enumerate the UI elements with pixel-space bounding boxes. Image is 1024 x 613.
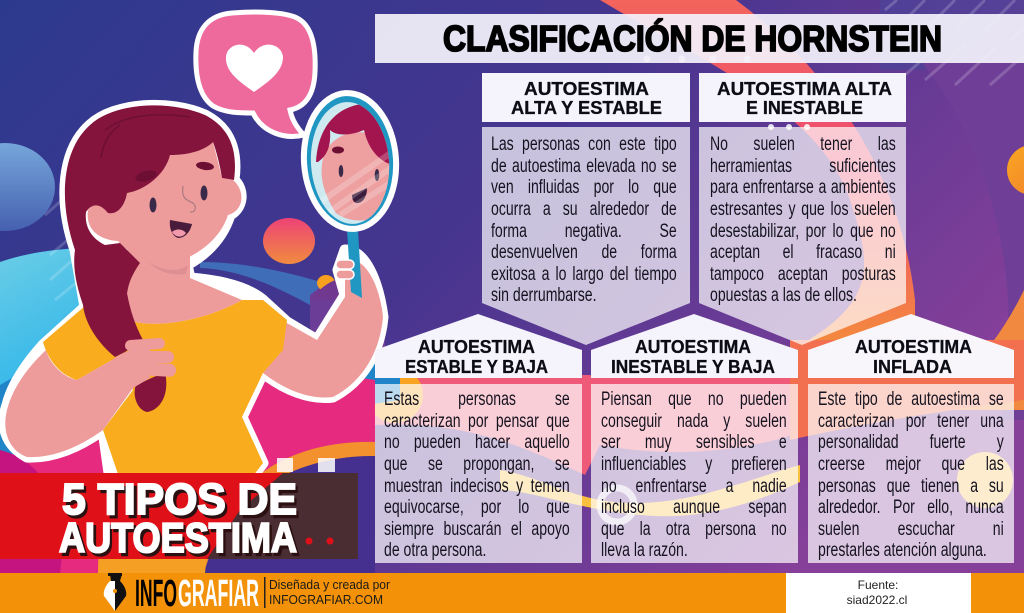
- footer bar: Diseñada y creada por: [269, 578, 390, 592]
- panel: autoestima estable y baja header: ESTABLE Y BAJA: [405, 357, 548, 377]
- source box: Fuente:: [858, 578, 898, 592]
- text: autoestima inestable y baja: influenciables y prefieren: [601, 454, 787, 475]
- text: autoestima alta e inestable: aceptan el fracaso ni: [710, 242, 896, 263]
- text: autoestima alta y estable: exitosa a lo largo del tiempo: [491, 264, 677, 285]
- heart icon: [226, 45, 283, 92]
- text: autoestima inflada: alrededor. Por ello, nunca: [818, 497, 1004, 518]
- banner: 5 tipos de autoestima: 5 TIPOS DE: [65, 478, 300, 527]
- panel: autoestima inestable y baja header: [591, 314, 798, 378]
- banner: 5 tipos de autoestima: AUTOESTIMA: [59, 514, 297, 561]
- text: autoestima estable y baja: [384, 389, 570, 561]
- panel: autoestima inflada header: INFLADA: [873, 357, 952, 377]
- braid end: [135, 372, 166, 412]
- character silhouette outline: [4, 105, 383, 480]
- decorative dots on panel edge: [768, 124, 810, 130]
- banner: 5 tipos de autoestima: 5 TIPOS DE: [62, 475, 297, 524]
- shirt: [43, 300, 287, 480]
- text: autoestima inestable y baja: [601, 389, 787, 561]
- face: [88, 142, 241, 264]
- panel: autoestima inflada header: [808, 314, 1014, 378]
- panel body shapes bottom row: [375, 384, 1014, 563]
- text: autoestima alta y estable: desenvuelven de forma: [491, 242, 677, 263]
- left arm with fingers: [5, 338, 176, 457]
- text: autoestima alta y estable: ocurra a su alrededor de: [491, 199, 677, 220]
- panel: autoestima alta y estable header: ALTA Y ESTABLE: [511, 98, 662, 118]
- panel: autoestima alta y estable header: [482, 73, 690, 122]
- text: autoestima alta y estable: Las personas con este tipo: [491, 134, 677, 155]
- text: autoestima estable y baja: que se propongan, se: [384, 454, 570, 475]
- panel: autoestima inflada header: AUTOESTIMA: [855, 337, 972, 357]
- speech bubble with heart: [196, 12, 315, 136]
- text: autoestima alta e inestable: tampoco aceptan posturas: [710, 264, 896, 285]
- text: autoestima alta e inestable: No suelen tener las: [710, 134, 896, 155]
- banner: 5 tipos de autoestima: [0, 473, 358, 564]
- text: autoestima estable y baja: equivocarse, por lo que: [384, 497, 570, 518]
- text: autoestima inestable y baja: conseguir nada y suelen: [601, 411, 787, 432]
- text: autoestima estable y baja: caracterizan por pensar que: [384, 411, 570, 432]
- text: autoestima inflada: prestarles atención alguna.: [818, 540, 987, 561]
- text: autoestima alta y estable: sin derrumbarse.: [491, 285, 596, 306]
- panel: autoestima estable y baja header: AUTOESTIMA: [418, 337, 535, 357]
- text: autoestima alta e inestable: estresantes y que los suelen: [710, 199, 896, 220]
- text: autoestima estable y baja: no pueden hacer aquello: [384, 432, 570, 453]
- text: autoestima inflada: personalidad fuerte y: [818, 432, 1004, 453]
- text: autoestima inestable y baja: lleva la razón.: [601, 540, 688, 561]
- text: autoestima inestable y baja: incluso aunque sepan: [601, 497, 787, 518]
- text: autoestima inflada: caracterizan por tener una: [818, 411, 1004, 432]
- icon: fountain pen logo: [104, 573, 126, 611]
- text: autoestima alta e inestable: herramientas suficientes: [710, 156, 896, 177]
- text: autoestima alta e inestable: para enfrentarse a ambientes: [710, 177, 896, 198]
- footer bar: [0, 573, 1024, 613]
- panel: autoestima estable y baja header: [375, 314, 582, 378]
- text: autoestima inestable y baja: ser muy sensibles e: [601, 432, 787, 453]
- neck: [100, 250, 242, 324]
- right arm: [263, 259, 383, 398]
- text: autoestima alta e inestable: opuestas a las de ellos.: [710, 285, 857, 306]
- text: autoestima inestable y baja: Piensan que no pueden: [601, 389, 787, 410]
- text: autoestima alta e inestable: desestabilizar, por lo que no: [710, 221, 896, 242]
- panel: autoestima alta y estable header: AUTOESTIMA: [524, 79, 649, 99]
- source box: siad2022.cl: [847, 593, 907, 607]
- text: autoestima estable y baja: siempre buscarán el apoyo: [384, 519, 570, 540]
- text: autoestima alta y estable: [491, 134, 677, 306]
- mirror: [299, 90, 401, 298]
- text: autoestima alta y estable: ven influidas por lo que: [491, 177, 677, 198]
- text: autoestima inflada: personas que tienen a su: [818, 476, 1004, 497]
- text: autoestima inflada: suelen escuchar ni: [818, 519, 1004, 540]
- text: autoestima alta y estable: forma negativa. Se: [491, 221, 677, 242]
- panel body shapes top row: [482, 127, 906, 345]
- character with mirror and speech bubble: [0, 10, 400, 473]
- text: autoestima inflada: creerse mejor que las: [818, 454, 1004, 475]
- text: autoestima estable y baja: muestran indecisos y temen: [384, 476, 570, 497]
- panel: autoestima alta e inestable header: [699, 73, 906, 122]
- hair: [65, 105, 235, 357]
- text: autoestima inestable y baja: que la otra persona no: [601, 519, 787, 540]
- title bar: CLASIFICACIÓN DE HORNSTEIN: [443, 17, 942, 59]
- panel: autoestima alta e inestable header: AUTOESTIMA ALTA: [717, 79, 892, 99]
- text: autoestima alta y estable: de autoestima elevada no se: [491, 156, 677, 177]
- panel: autoestima inestable y baja header: INESTABLE Y BAJA: [611, 357, 775, 377]
- footer bar: INFOGRAFIAR.COM: [269, 593, 383, 607]
- panel: autoestima inestable y baja header: AUTOESTIMA: [635, 337, 751, 357]
- source box: [786, 573, 971, 613]
- text: autoestima estable y baja: de otra persona.: [384, 540, 486, 561]
- banner: 5 tipos de autoestima: AUTOESTIMA: [62, 517, 300, 564]
- text: autoestima inestable y baja: no enfrentarse a nadie: [601, 476, 787, 497]
- panel: autoestima alta e inestable header: E INESTABLE: [746, 98, 863, 118]
- text: autoestima alta e inestable: [710, 134, 896, 306]
- text: autoestima inflada: Este tipo de autoestima se: [818, 389, 1004, 410]
- text: autoestima inflada: [818, 389, 1004, 561]
- facial features: [101, 115, 214, 275]
- fingers on mirror handle: [336, 260, 354, 279]
- text: autoestima estable y baja: Estas personas se: [384, 389, 570, 410]
